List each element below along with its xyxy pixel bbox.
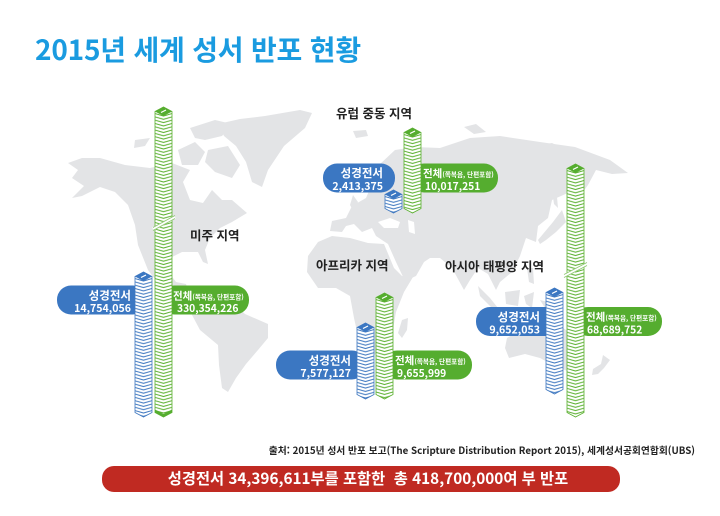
pill: Africa total — [383, 350, 472, 380]
pill: Americas total: 330,354,226 — [177, 300, 238, 315]
bar: Asia total — [564, 164, 587, 417]
region: Europe & Middle East — [323, 103, 498, 213]
pill: Asia full Bible: 9,652,053 — [489, 322, 540, 338]
pill: Europe total: 10,017,251 — [425, 178, 480, 193]
pill: Europe total: 전체(쪽복음, 단편포함) — [423, 166, 494, 181]
summary banner — [102, 466, 620, 492]
pill: Asia full Bible — [476, 307, 561, 338]
bar: Africa total — [376, 293, 393, 399]
bar: Europe total — [404, 128, 421, 213]
pill: Asia total — [574, 307, 662, 336]
bar: Americas total — [153, 107, 175, 417]
pill: Americas full Bible: 14,754,056 — [74, 301, 131, 316]
heading: Americas: 미주 지역 — [190, 225, 240, 244]
title: 2015년 세계 성서 반포 현황 — [35, 29, 361, 69]
pill: Africa total: 전체(쪽복음, 단편포함) — [395, 353, 466, 368]
pill: Europe full Bible: 2,413,375 — [332, 179, 383, 194]
bar: Africa full Bible — [357, 323, 374, 399]
pill: Americas full Bible — [57, 286, 147, 316]
source note: 출처: 2015년 성서 반포 보고(The Scripture Distribution Report 2015), 세계성서공회연합회(UBS) — [269, 443, 695, 457]
pill: Europe full Bible — [323, 164, 395, 194]
pill: Americas total — [160, 286, 249, 315]
pill: Americas full Bible: 성경전서 — [89, 288, 131, 304]
pill: Asia total: 68,689,752 — [587, 322, 642, 336]
bar: Europe full Bible — [385, 190, 402, 213]
pill: Asia full Bible: 성경전서 — [498, 309, 540, 325]
pill: Europe total — [410, 164, 498, 193]
summary banner: 성경전서 34,396,611부를 포함한 총 418,700,000여 부 반포 — [168, 467, 568, 489]
pill: Africa full Bible: 7,577,127 — [300, 366, 351, 381]
pill: Asia total: 전체(쪽복음, 단편포함) — [586, 310, 657, 324]
heading: Asia Pacific: 아시아 태평양 지역 — [445, 256, 544, 275]
world map — [68, 110, 628, 392]
region: Africa — [276, 255, 472, 399]
heading: Europe and Middle East: 유럽 중동 지역 — [336, 103, 412, 122]
heading: Africa: 아프리카 지역 — [316, 255, 389, 274]
pill: Europe full Bible: 성경전서 — [341, 165, 383, 181]
bar: Americas full Bible — [135, 272, 152, 417]
pill: Africa full Bible — [276, 350, 366, 381]
pill: Americas total: 전체(쪽복음, 단편포함) — [173, 288, 244, 304]
region: Asia Pacific — [445, 164, 662, 417]
pill: Africa full Bible: 성경전서 — [309, 352, 351, 368]
bar: Asia full Bible — [546, 288, 563, 394]
region: Americas — [57, 107, 249, 417]
pill: Africa total: 9,655,999 — [397, 365, 446, 380]
